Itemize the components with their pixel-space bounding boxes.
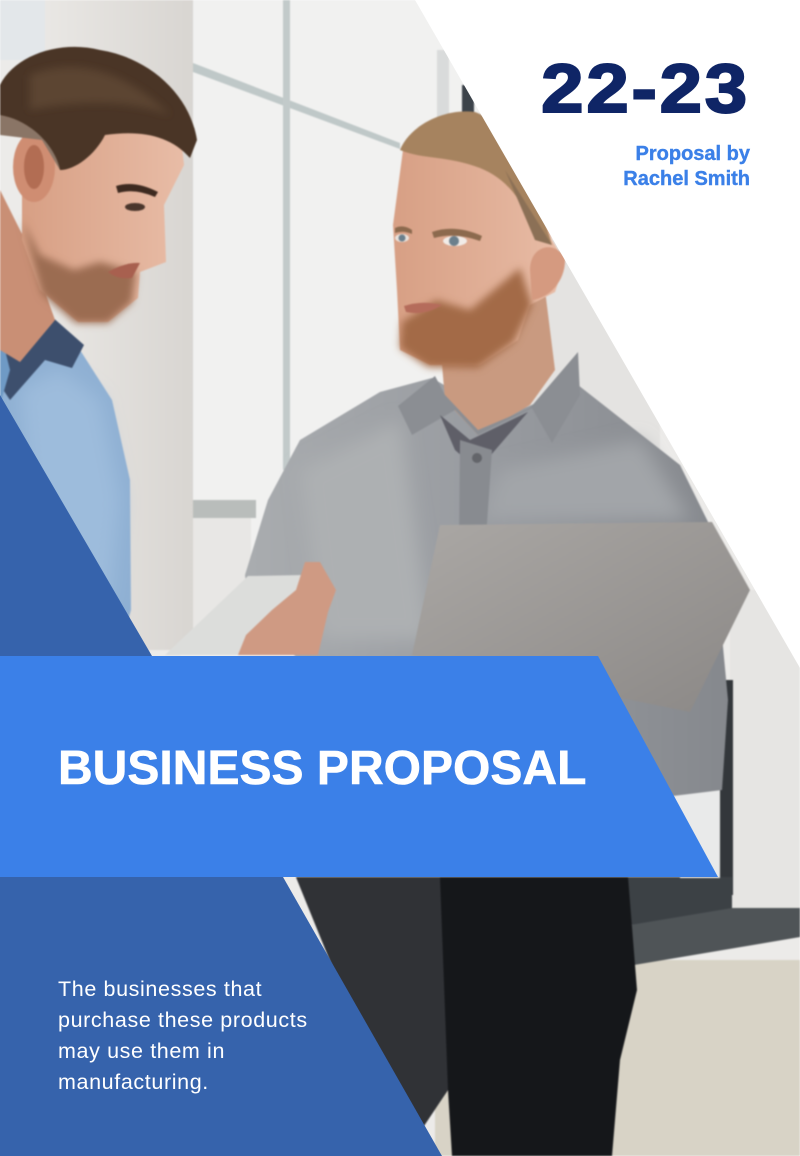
window frames: [181, 0, 660, 638]
description text: manufacturing.: [58, 1070, 209, 1094]
description text: [58, 977, 308, 1094]
shirt: [0, 330, 131, 650]
column: [45, 0, 193, 650]
hair: [0, 47, 197, 170]
description text: The businesses that: [58, 977, 262, 1001]
face: [393, 135, 565, 365]
year heading: 22-23: [541, 50, 750, 127]
title: BUSINESS PROPOSAL: [58, 742, 586, 795]
hand: [238, 562, 336, 655]
eyes and brows: [432, 229, 482, 241]
author credit: Proposal by: [636, 143, 750, 165]
description text: purchase these products: [58, 1008, 308, 1032]
lower wall and window sill: [435, 590, 800, 1156]
beard: [22, 220, 136, 323]
laptop: [412, 522, 750, 712]
collar: [398, 352, 580, 443]
collar: [0, 315, 84, 400]
shirt: [245, 378, 728, 800]
description text: may use them in: [58, 1039, 225, 1063]
author credit: [623, 143, 750, 190]
ear: [530, 247, 565, 300]
hair: [400, 111, 552, 245]
author credit: Rachel Smith: [623, 168, 750, 190]
left man: [0, 47, 197, 650]
neck: [0, 190, 55, 362]
pants: [296, 877, 637, 1156]
neck: [440, 290, 555, 435]
face: [22, 120, 184, 322]
right man: [165, 111, 750, 1156]
eye and brow: [116, 184, 158, 197]
tablet: [165, 575, 304, 655]
ear: [13, 132, 55, 202]
beard: [400, 268, 532, 368]
